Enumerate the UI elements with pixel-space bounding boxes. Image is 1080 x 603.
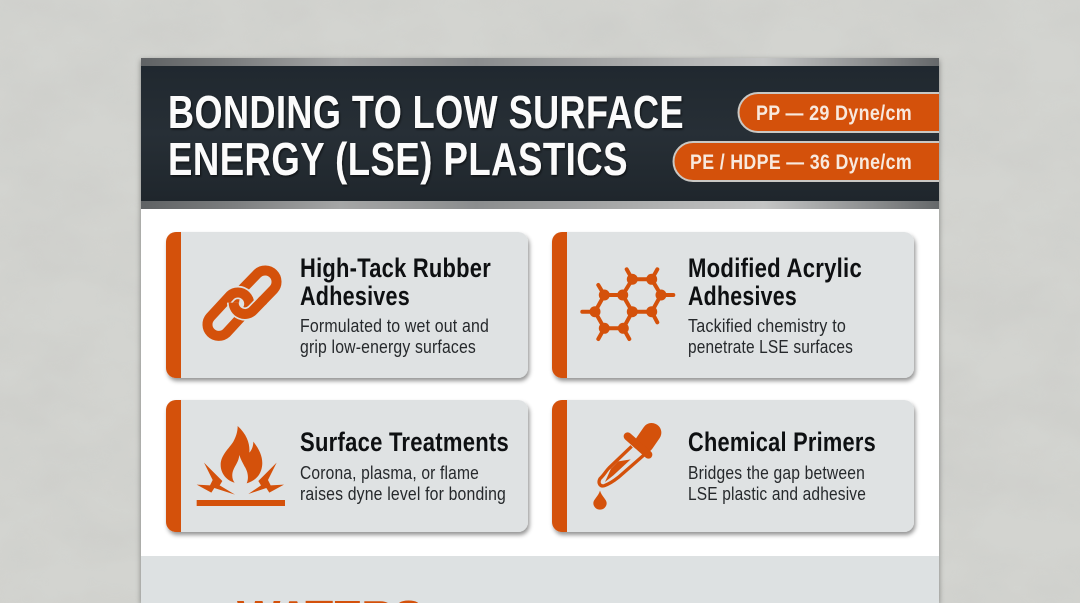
heading [688, 253, 862, 311]
card: modified acrylic adhesives [552, 232, 914, 378]
heading: Adhesives [300, 281, 410, 311]
icon: dropper [593, 433, 652, 510]
title: ENERGY (LSE) PLASTICS [168, 133, 628, 185]
description: raises dyne level for bonding [300, 483, 506, 504]
description: Formulated to wet out and [300, 315, 489, 336]
heading: High-Tack Rubber [300, 253, 491, 283]
card: chemical primers [552, 400, 914, 532]
title: BONDING TO LOW SURFACE [168, 86, 684, 138]
description: penetrate LSE surfaces [688, 336, 853, 357]
description: Corona, plasma, or flame [300, 462, 479, 483]
panel: lower section, cropped at the page edge [141, 556, 939, 603]
card: high-tack rubber adhesives [166, 232, 528, 378]
icon: flame with sparks [197, 426, 285, 506]
heading: Modified Acrylic [688, 253, 862, 283]
description: grip low-energy surfaces [300, 336, 476, 357]
heading: Adhesives [688, 281, 797, 311]
badge: PE / HDPE dyne level [674, 142, 939, 181]
title [168, 86, 684, 185]
description [688, 462, 866, 504]
description [300, 315, 489, 357]
description [300, 462, 506, 504]
heading [300, 253, 491, 311]
description: LSE plastic and adhesive [688, 483, 866, 504]
header band [141, 58, 939, 209]
description: Tackified chemistry to [688, 315, 846, 336]
heading: Chemical Primers [688, 427, 876, 457]
badge: PE / HDPE dyne level: PE / HDPE — 36 Dyne/cm [690, 150, 912, 174]
card: surface treatments [166, 400, 528, 532]
badge: PP dyne level: PP — 29 Dyne/cm [756, 101, 912, 125]
badge: PP dyne level [738, 93, 939, 132]
icon: molecule [582, 269, 673, 339]
panel: poster sheet [141, 58, 939, 603]
heading: Surface Treatments [300, 427, 509, 457]
description: Bridges the gap between [688, 462, 865, 483]
icon: chain link [207, 270, 277, 336]
description [688, 315, 853, 357]
